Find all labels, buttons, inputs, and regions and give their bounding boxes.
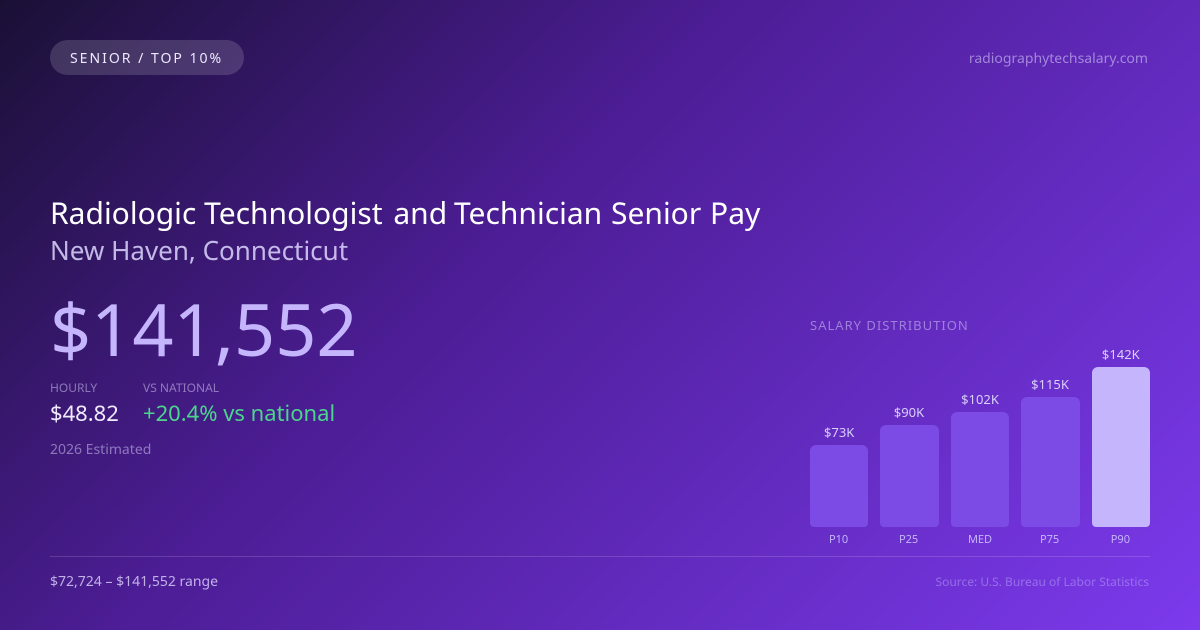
label P10: P10 [829, 532, 848, 547]
stat: vs national [143, 379, 335, 428]
salary range: $72,724 – $141,552 range [50, 572, 218, 591]
badge: senior / top 10%: SENIOR / TOP 10% [70, 49, 223, 68]
bar P90 [1092, 367, 1150, 527]
vs national value: +20.4% vs national [143, 398, 335, 428]
chart heading: SALARY DISTRIBUTION [810, 316, 969, 334]
bar P75 [1021, 397, 1080, 527]
year note: 2026 Estimated [50, 440, 151, 459]
value P90: $142K [1102, 345, 1140, 363]
title: Radiologic Technologist [50, 192, 383, 233]
location subtitle: New Haven, Connecticut [50, 232, 348, 268]
label MED: MED [968, 532, 992, 547]
title: Senior [611, 192, 701, 233]
stat: hourly [50, 379, 119, 428]
label P25: P25 [899, 532, 918, 547]
label P75: P75 [1040, 532, 1059, 547]
hourly label: HOURLY [50, 379, 97, 396]
value P75: $115K [1031, 375, 1069, 393]
hourly value: $48.82 [50, 398, 119, 428]
value P25: $90K [894, 403, 924, 421]
bar P25 [880, 425, 939, 527]
title: Technician [454, 192, 602, 233]
vs national label: VS NATIONAL [143, 379, 219, 396]
title: and [393, 192, 447, 233]
title: Pay [710, 192, 760, 233]
site domain: radiographytechsalary.com [969, 49, 1148, 68]
value P10: $73K [824, 423, 854, 441]
label P90: P90 [1111, 532, 1130, 547]
bar MED [951, 412, 1009, 527]
source note: Source: U.S. Bureau of Labor Statistics [936, 573, 1149, 590]
bar P10 [810, 445, 868, 527]
title [50, 192, 760, 233]
badge: senior / top 10% [50, 40, 244, 75]
value MED: $102K [961, 390, 999, 408]
main salary figure: $141,552 [50, 280, 358, 378]
